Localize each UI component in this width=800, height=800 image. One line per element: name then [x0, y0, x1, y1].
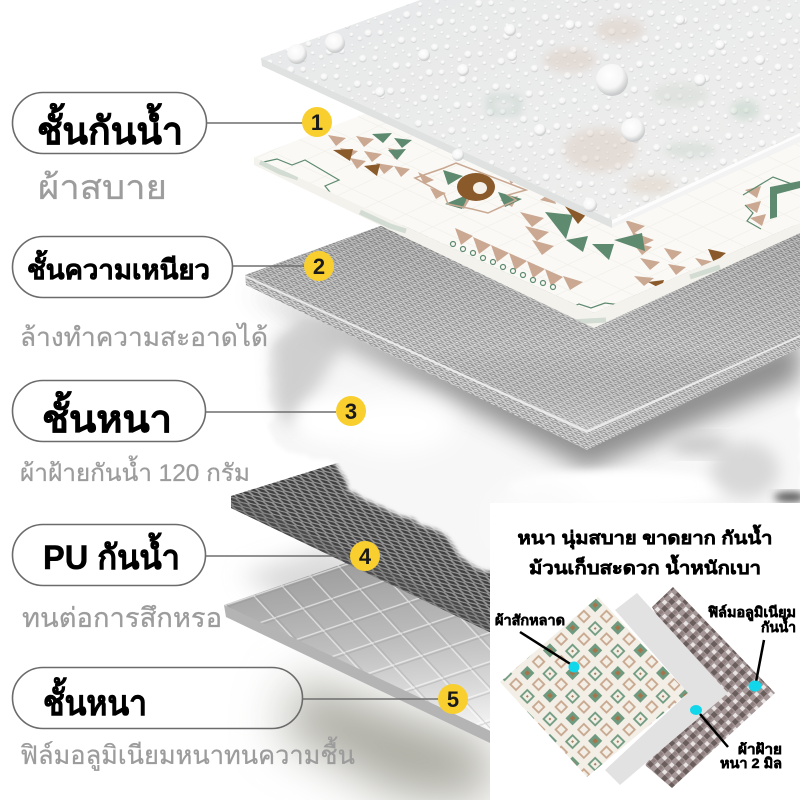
label 1 — [12, 92, 332, 207]
label 5: ชั้นหนา — [43, 677, 147, 723]
callout panel: material close-up — [490, 503, 800, 800]
pointer: aluminium film: ฟิล์มอลูมิเนียม — [707, 604, 796, 621]
shadow beneath bottom layers — [240, 545, 490, 800]
label 4: 4 — [359, 544, 372, 569]
label 1: 1 — [311, 110, 323, 135]
layer 1a: water-repellent top sheet — [261, 0, 800, 228]
pointer: cotton: ผ้าฝ้าย — [738, 741, 782, 757]
faint print through sheet — [490, 18, 759, 195]
label 1: ชั้นกันน้ำ — [37, 103, 183, 153]
cross motif outline — [415, 163, 526, 213]
large water drops — [287, 15, 765, 212]
pointer: cotton — [690, 705, 782, 771]
label 3: ผ้าฝ้ายกันน้ำ 120 กรัม — [20, 455, 250, 487]
printed fabric swatch — [500, 597, 688, 777]
triangle row — [328, 135, 786, 290]
label 3 — [12, 380, 366, 487]
pointer: aluminium film: กันน้ำ — [761, 616, 796, 635]
layer 2: mesh fabric — [245, 225, 800, 450]
panel heading: หนา นุ่มสบาย ขาดยาก กันน้ำ — [518, 524, 772, 550]
pointer: fabric — [495, 612, 580, 672]
panel heading — [518, 524, 772, 578]
label 2: ล้างทำความสะอาดได้ — [20, 322, 268, 352]
ring row — [450, 242, 556, 290]
foil swatch — [645, 587, 775, 788]
label 2 — [12, 236, 334, 352]
pointer: cotton: หนา 2 มิล — [720, 755, 782, 771]
pointer: fabric: ผ้าสักหลาด — [495, 612, 565, 628]
label 4: ทนต่อการสึกหรอ — [22, 603, 222, 633]
label 2: 2 — [313, 254, 325, 279]
label 5 — [12, 668, 468, 771]
label 3: 3 — [345, 399, 357, 424]
layer 4: dark mesh — [231, 463, 510, 637]
label 5: ฟิล์มอลูมิเนียมหนาทนความชื้น — [20, 736, 355, 771]
label 4 — [12, 524, 380, 633]
label 4: PU กันน้ำ — [43, 532, 180, 577]
cotton swatch — [605, 593, 728, 785]
layer 1b: patterned fabric — [254, 100, 800, 328]
label 2: ชั้นความเหนียว — [27, 249, 210, 285]
label 5: 5 — [447, 687, 459, 712]
label 1: ผ้าสบาย — [38, 169, 167, 207]
panel heading: ม้วนเก็บสะดวก น้ำหนักเบา — [529, 554, 761, 578]
layer 5: aluminium film — [224, 558, 520, 745]
pointer: aluminium film — [707, 604, 796, 692]
layer 3: cotton filling — [245, 290, 800, 575]
label 3: ชั้นหนา — [42, 391, 172, 441]
